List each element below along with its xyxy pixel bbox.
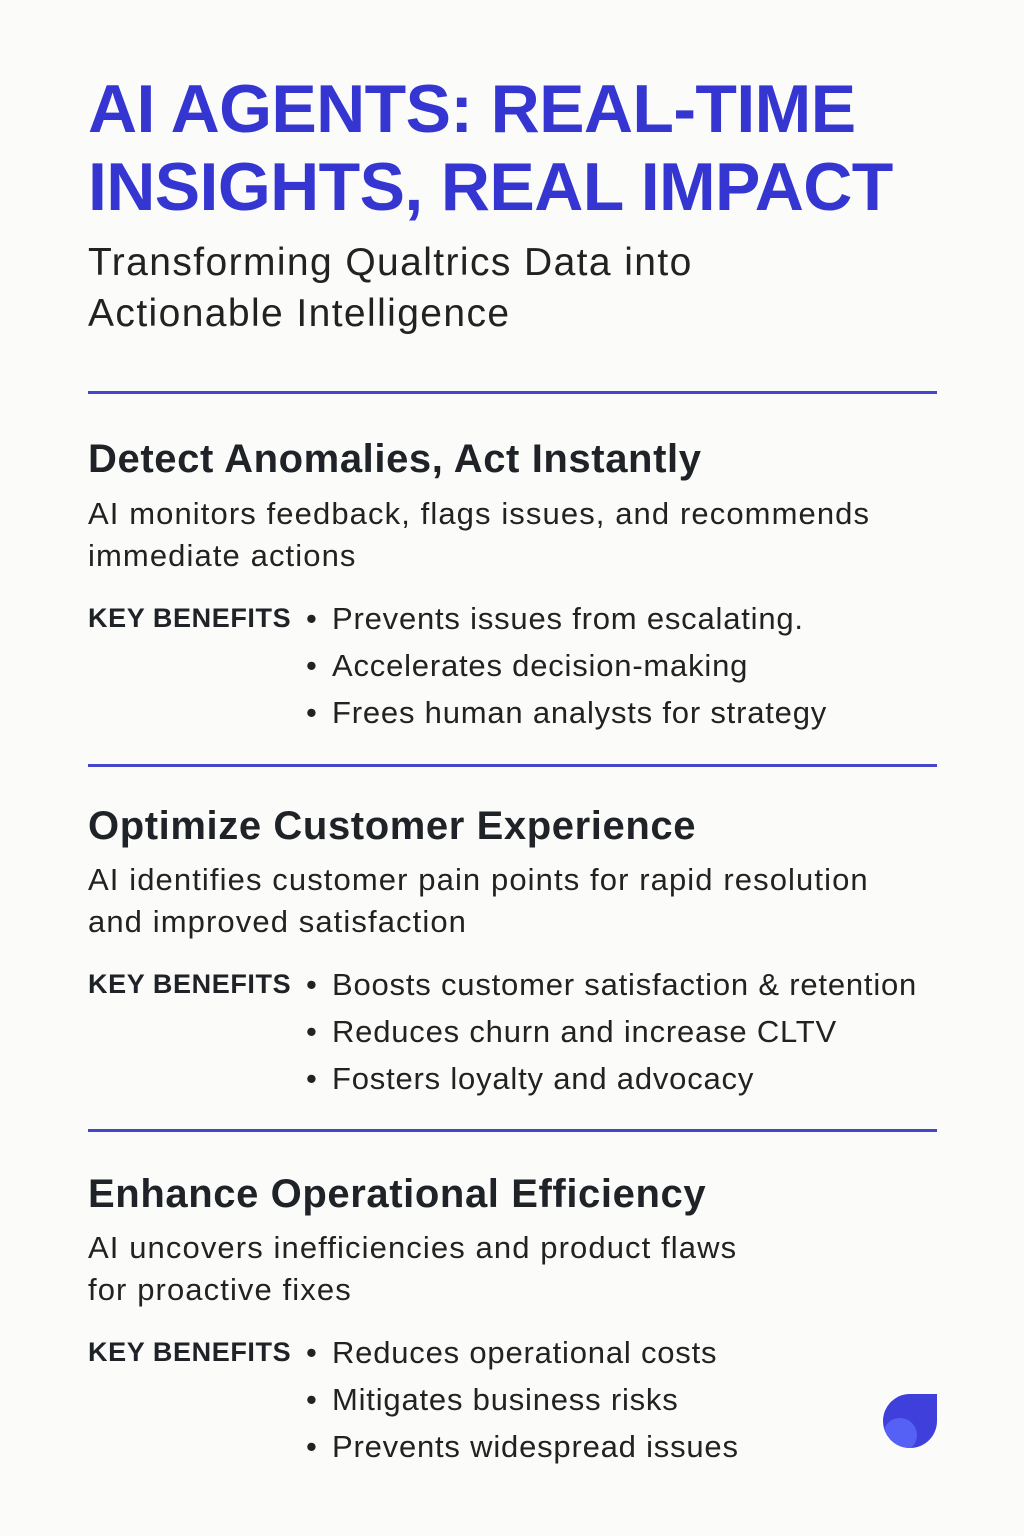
icon: logo drop [883, 1394, 937, 1448]
title: AI AGENTS: REAL-TIME [88, 71, 855, 147]
benefits list: Reduces churn and increase CLTV [332, 1014, 837, 1049]
description: and improved satisfaction [88, 904, 467, 939]
subtitle: Actionable Intelligence [88, 292, 510, 335]
key benefits label: KEY BENEFITS [88, 969, 291, 999]
benefits list: Prevents widespread issues [332, 1429, 739, 1464]
benefits list [307, 601, 827, 730]
subtitle: Transforming Qualtrics Data into [88, 241, 693, 284]
benefits list: Mitigates business risks [332, 1382, 679, 1417]
section: detect anomalies [88, 437, 870, 730]
key benefits label: KEY BENEFITS [88, 1337, 291, 1367]
description: for proactive fixes [88, 1272, 352, 1307]
benefits list: Accelerates decision-making [332, 648, 748, 683]
subtitle [88, 241, 693, 335]
description: AI monitors feedback, flags issues, and recommends [88, 496, 870, 531]
section: operational efficiency [88, 1172, 739, 1464]
description [88, 1230, 737, 1307]
benefits list [307, 967, 917, 1096]
section: customer experience [88, 804, 917, 1096]
benefits list: Frees human analysts for strategy [332, 695, 827, 730]
heading: Enhance Operational Efficiency [88, 1172, 706, 1216]
description [88, 862, 869, 939]
description [88, 496, 870, 573]
title: INSIGHTS, REAL IMPACT [88, 149, 893, 225]
benefits list: Fosters loyalty and advocacy [332, 1061, 754, 1096]
description: immediate actions [88, 538, 357, 573]
benefits list [307, 1335, 739, 1464]
key benefits label: KEY BENEFITS [88, 603, 291, 633]
description: AI uncovers inefficiencies and product flaws [88, 1230, 737, 1265]
heading: Detect Anomalies, Act Instantly [88, 437, 702, 481]
heading: Optimize Customer Experience [88, 804, 696, 848]
description: AI identifies customer pain points for rapid resolution [88, 862, 869, 897]
benefits list: Prevents issues from escalating. [332, 601, 804, 636]
title [88, 71, 893, 225]
benefits list: Boosts customer satisfaction & retention [332, 967, 917, 1002]
benefits list: Reduces operational costs [332, 1335, 717, 1370]
